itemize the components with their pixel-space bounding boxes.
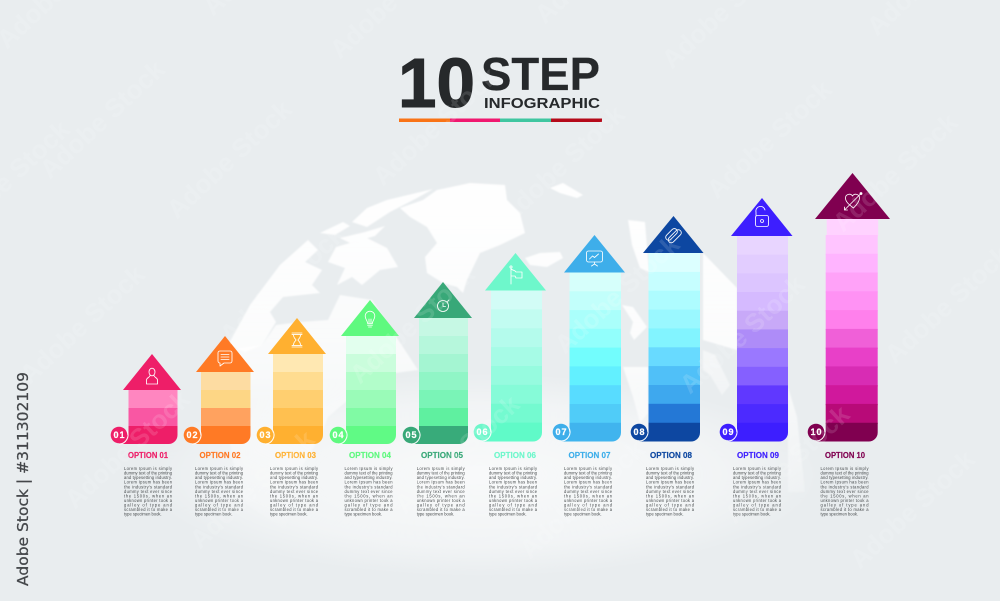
body text: dummy text of the printing (124, 471, 173, 476)
body text (646, 466, 695, 517)
body text: Lorem Ipsum has been (417, 480, 465, 485)
map: North America (222, 295, 418, 530)
bands (639, 253, 700, 442)
number badge (631, 424, 648, 441)
body text: the industry's standard (564, 484, 613, 489)
body text: Lorem Ipsum has been (270, 480, 319, 485)
body text: type specimen book. (733, 512, 771, 517)
body text: and typesetting industry. (564, 475, 612, 480)
body text: scrambled it to make a (820, 507, 869, 512)
bands (119, 390, 178, 444)
body text: Lorem Ipsum is simply (646, 466, 695, 471)
map: Greenland (400, 183, 525, 293)
body text: galley of type and (417, 503, 465, 508)
watermark layer: Adobe Stock (549, 229, 686, 359)
watermark layer: Adobe Stock (34, 54, 171, 184)
body text: Lorem Ipsum has been (733, 480, 782, 485)
body text: the 1500s, when an (195, 493, 244, 498)
body text (344, 466, 393, 517)
watermark layer: Adobe Stock (494, 99, 631, 229)
body text: unknown printer took a (646, 498, 695, 503)
watermark layer: Adobe Stock (844, 444, 981, 574)
body text: and typesetting industry. (344, 475, 392, 480)
body text (124, 466, 173, 517)
body text: and typesetting industry. (417, 475, 465, 480)
body text (564, 466, 613, 517)
option 07 text (564, 451, 613, 517)
body text: Lorem Ipsum has been (195, 480, 244, 485)
body text (270, 466, 319, 517)
body text: galley of type and (124, 503, 173, 508)
body text: the industry's standard (124, 484, 173, 489)
arrow 04 (330, 300, 399, 444)
body text: dummy text of the printing (195, 471, 244, 476)
number badge: 06 (476, 427, 488, 437)
number badge (808, 424, 825, 441)
number badge (720, 424, 737, 441)
body text: type specimen book. (820, 512, 858, 517)
body text: Lorem Ipsum is simply (489, 466, 538, 471)
world map (140, 183, 820, 577)
arrowhead (485, 253, 546, 290)
body text (417, 466, 466, 517)
body text: dummy text ever since (564, 489, 613, 494)
body text (489, 466, 538, 517)
bands (192, 372, 250, 444)
body text: dummy text ever since (195, 489, 244, 494)
body text: the industry's standard (733, 484, 782, 489)
body text: Lorem Ipsum is simply (733, 466, 782, 471)
body text: unknown printer took a (564, 498, 613, 503)
body text: scrambled it to make a (733, 507, 782, 512)
body text: the 1500s, when an (646, 493, 695, 498)
body text: and typesetting industry. (646, 475, 694, 480)
option 10 text (820, 451, 869, 517)
map: lower glow (140, 373, 820, 577)
body text: type specimen book. (646, 512, 684, 517)
map: Arctic islands (320, 189, 433, 243)
body text: dummy text of the printing (344, 471, 393, 476)
title underline (399, 118, 602, 122)
body text: unknown printer took a (344, 498, 393, 503)
option 03 text (270, 451, 319, 517)
body text: scrambled it to make a (124, 507, 173, 512)
body text: unknown printer took a (417, 498, 465, 503)
number badge: 08 (634, 427, 644, 437)
body text (733, 466, 782, 517)
body text: dummy text of the printing (270, 471, 319, 476)
body text: Lorem Ipsum is simply (270, 466, 319, 471)
body text: dummy text ever since (417, 489, 465, 494)
arrow 03 (257, 318, 326, 444)
body text: dummy text of the printing (820, 471, 869, 476)
body text: scrambled it to make a (195, 507, 244, 512)
body text: the 1500s, when an (270, 493, 319, 498)
number badge: 07 (556, 427, 566, 437)
body text: Lorem Ipsum is simply (820, 466, 869, 471)
heading: OPTION 02 (200, 451, 241, 460)
body text: unknown printer took a (489, 498, 538, 503)
watermark layer: Adobe Stock (719, 399, 856, 529)
watermark layer: Adobe Stock (59, 384, 196, 514)
body text: type specimen book. (564, 512, 602, 517)
map: globe edge crescent (788, 387, 805, 492)
map: British Isles (622, 305, 647, 340)
body text: galley of type and (646, 503, 695, 508)
body text: type specimen book. (270, 512, 308, 517)
watermark layer: Adobe Stock (14, 259, 151, 389)
map: Canada north-west (228, 240, 322, 352)
option 02 text (195, 451, 244, 517)
arrowhead (414, 282, 472, 318)
body text: galley of type and (564, 503, 613, 508)
body text: the 1500s, when an (417, 493, 465, 498)
arrowhead (564, 235, 625, 272)
bands (265, 354, 323, 444)
body text: dummy text ever since (270, 489, 319, 494)
body text: the industry's standard (344, 484, 393, 489)
body text: the 1500s, when an (820, 493, 869, 498)
title: INFOGRAPHIC: INFOGRAPHIC (484, 96, 601, 112)
arrowhead (123, 354, 181, 390)
icon: speech bubble (218, 351, 232, 366)
number badge (403, 427, 420, 444)
map: Scandinavia (628, 220, 649, 272)
body text: dummy text ever since (820, 489, 869, 494)
number badge: 09 (722, 427, 734, 437)
map: Iceland (525, 252, 563, 267)
option 04 text (344, 451, 393, 517)
body text: the 1500s, when an (489, 493, 538, 498)
watermark layer: Adobe Stock (161, 94, 298, 224)
watermark layer: Adobe Stock (214, 219, 351, 349)
body text: Lorem Ipsum has been (646, 480, 695, 485)
body text: type specimen book. (124, 512, 162, 517)
body text: unknown printer took a (733, 498, 782, 503)
watermark layer: Adobe Stock (701, 74, 838, 204)
body text: Lorem Ipsum is simply (124, 466, 173, 471)
body text: the 1500s, when an (124, 493, 173, 498)
body text: the industry's standard (417, 484, 465, 489)
bands (338, 336, 396, 444)
body text: unknown printer took a (124, 498, 173, 503)
arrow 02 (184, 336, 254, 444)
icon: presentation board (586, 251, 602, 266)
body text: type specimen book. (489, 512, 527, 517)
heading: OPTION 09 (737, 451, 780, 460)
option 08 text (646, 451, 695, 517)
body text: dummy text of the printing (646, 471, 695, 476)
body text: galley of type and (270, 503, 319, 508)
arrowhead (196, 336, 254, 372)
body text: and typesetting industry. (733, 475, 781, 480)
heading: OPTION 06 (494, 451, 537, 460)
watermark layer: Adobe Stock (184, 424, 321, 554)
heading: OPTION 05 (421, 451, 464, 460)
body text: Lorem Ipsum has been (820, 480, 869, 485)
map: Iberia (623, 367, 648, 423)
body text: the industry's standard (270, 484, 319, 489)
heading: OPTION 07 (568, 451, 611, 460)
body text: Lorem Ipsum has been (489, 480, 538, 485)
body text: dummy text of the printing (733, 471, 782, 476)
arrow 06 (474, 253, 546, 442)
number badge: 01 (114, 430, 124, 440)
body text: type specimen book. (417, 512, 454, 517)
body text: the 1500s, when an (733, 493, 782, 498)
body text: the industry's standard (646, 484, 695, 489)
heading: OPTION 04 (349, 451, 392, 460)
number badge: 10 (810, 427, 822, 437)
icon: person (146, 368, 158, 384)
watermark layer: Adobe Stock (674, 269, 811, 399)
number badge: 03 (260, 430, 270, 440)
body text: and typesetting industry. (270, 475, 318, 480)
option 05 text (417, 451, 466, 517)
body text: scrambled it to make a (270, 507, 319, 512)
icon: heart with arrow (844, 192, 862, 210)
body text: galley of type and (733, 503, 782, 508)
body text: the industry's standard (195, 484, 244, 489)
number badge (474, 424, 491, 441)
title: number 10: 10 (398, 44, 475, 122)
icon: hourglass (292, 333, 302, 347)
body text: Lorem Ipsum has been (124, 480, 173, 485)
body text: dummy text ever since (344, 489, 393, 494)
bands (482, 290, 542, 442)
map: Italy (703, 350, 730, 395)
number badge (553, 424, 570, 441)
bands (816, 219, 878, 442)
body text: galley of type and (344, 503, 393, 508)
bands (411, 318, 468, 444)
heading: OPTION 08 (650, 451, 693, 460)
bands (728, 236, 788, 442)
number badge: 05 (406, 430, 416, 440)
heading: OPTION 01 (128, 451, 169, 460)
heading: OPTION 03 (275, 451, 317, 460)
body text: Lorem Ipsum is simply (344, 466, 393, 471)
body text (820, 466, 869, 517)
arrow 01 (111, 354, 181, 444)
body text: dummy text ever since (124, 489, 173, 494)
body text: Lorem Ipsum is simply (564, 466, 613, 471)
body text: and typesetting industry. (489, 475, 537, 480)
body text: scrambled it to make a (417, 507, 465, 512)
arrowhead (731, 198, 792, 236)
icon: flag (510, 266, 522, 284)
arrowhead (643, 216, 704, 253)
body text: and typesetting industry. (124, 475, 172, 480)
bands (561, 272, 621, 442)
option 09 text (733, 451, 782, 517)
watermark layer: Adobe Stock (389, 389, 526, 519)
number badge: 04 (332, 430, 344, 440)
stock id label: Adobe Stock | #311302109 (14, 372, 32, 586)
watermark layer: Adobe Stock (827, 107, 964, 237)
map: Baffin Island (328, 238, 398, 285)
map: Northern Europe (703, 253, 737, 350)
watermark layer: Adobe Stock (367, 61, 504, 191)
arrowhead (341, 300, 399, 336)
body text: scrambled it to make a (646, 507, 695, 512)
body text: unknown printer took a (270, 498, 319, 503)
body text: dummy text of the printing (417, 471, 465, 476)
number badge (330, 427, 347, 444)
title (398, 44, 602, 122)
body text: and typesetting industry. (195, 475, 243, 480)
body text: type specimen book. (195, 512, 233, 517)
body text: Lorem Ipsum is simply (195, 466, 244, 471)
body text: dummy text ever since (733, 489, 782, 494)
body text: Lorem Ipsum has been (564, 480, 613, 485)
body text: unknown printer took a (820, 498, 869, 503)
body text: and typesetting industry. (820, 475, 868, 480)
option 01 text (124, 451, 173, 517)
watermark layer: Adobe Stock (514, 434, 651, 564)
body text: dummy text of the printing (489, 471, 538, 476)
body text: unknown printer took a (195, 498, 244, 503)
body text: the industry's standard (489, 484, 538, 489)
map: Svalbard (550, 183, 583, 198)
heading: OPTION 10 (825, 451, 866, 460)
watermark layer: Adobe Stock (344, 259, 481, 389)
body text: Lorem Ipsum has been (344, 480, 393, 485)
body text: galley of type and (489, 503, 538, 508)
arrowhead (815, 173, 890, 219)
body text (195, 466, 244, 517)
title: STEP: STEP (481, 48, 600, 100)
body text: type specimen book. (344, 512, 382, 517)
body text: Lorem Ipsum is simply (417, 466, 466, 471)
body text: dummy text ever since (489, 489, 538, 494)
body text: scrambled it to make a (564, 507, 613, 512)
option 06 text (489, 451, 538, 517)
number badge: 02 (186, 430, 198, 440)
arrow 09 (720, 198, 792, 442)
body text: the industry's standard (820, 484, 869, 489)
arrow 10 (808, 173, 890, 442)
body text: scrambled it to make a (344, 507, 393, 512)
body text: dummy text of the printing (564, 471, 613, 476)
arrow 08 (631, 216, 704, 442)
icon: paper clip link (664, 226, 683, 244)
arrow 05 (403, 282, 472, 444)
body text: galley of type and (195, 503, 244, 508)
icon: open padlock (756, 206, 768, 226)
arrow 07 (553, 235, 625, 442)
body text: the 1500s, when an (344, 493, 393, 498)
icon: light bulb (365, 311, 375, 327)
arrowhead (268, 318, 326, 354)
icon: stopwatch (438, 300, 449, 312)
body text: the 1500s, when an (564, 493, 613, 498)
body text: scrambled it to make a (489, 507, 538, 512)
body text: galley of type and (820, 503, 869, 508)
body text: dummy text ever since (646, 489, 695, 494)
